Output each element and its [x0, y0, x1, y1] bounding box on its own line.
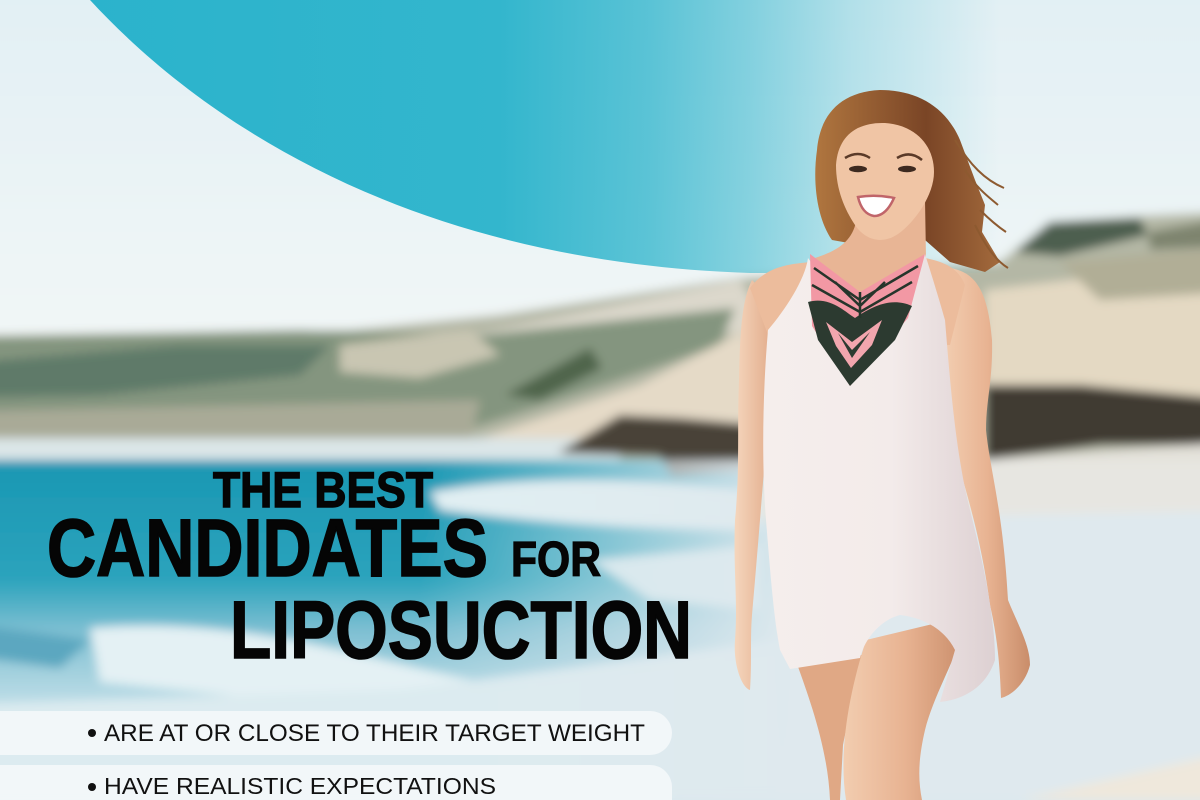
face: [836, 123, 934, 240]
title: CANDIDATES: [47, 503, 488, 594]
list item 2: HAVE REALISTIC EXPECTATIONS: [104, 773, 496, 799]
left arm: [735, 280, 772, 690]
title: THE BEST: [213, 462, 433, 518]
list item 2: [0, 765, 672, 800]
legs: [797, 655, 862, 800]
smile: [858, 196, 894, 216]
right arm: [945, 268, 1030, 698]
necklace embroidery: [808, 254, 925, 386]
neck: [815, 200, 926, 300]
list item 1: [0, 711, 672, 755]
shoulders: [750, 258, 965, 345]
title: [47, 462, 692, 676]
teal curved banner: [90, 0, 1000, 273]
title: FOR: [511, 533, 601, 587]
dress: [763, 254, 995, 702]
title: LIPOSUCTION: [230, 585, 692, 676]
eyes and brows: [845, 154, 922, 172]
hair: [815, 90, 1008, 272]
list item 1: ARE AT OR CLOSE TO THEIR TARGET WEIGHT: [104, 720, 645, 747]
woman figure: [735, 90, 1030, 800]
